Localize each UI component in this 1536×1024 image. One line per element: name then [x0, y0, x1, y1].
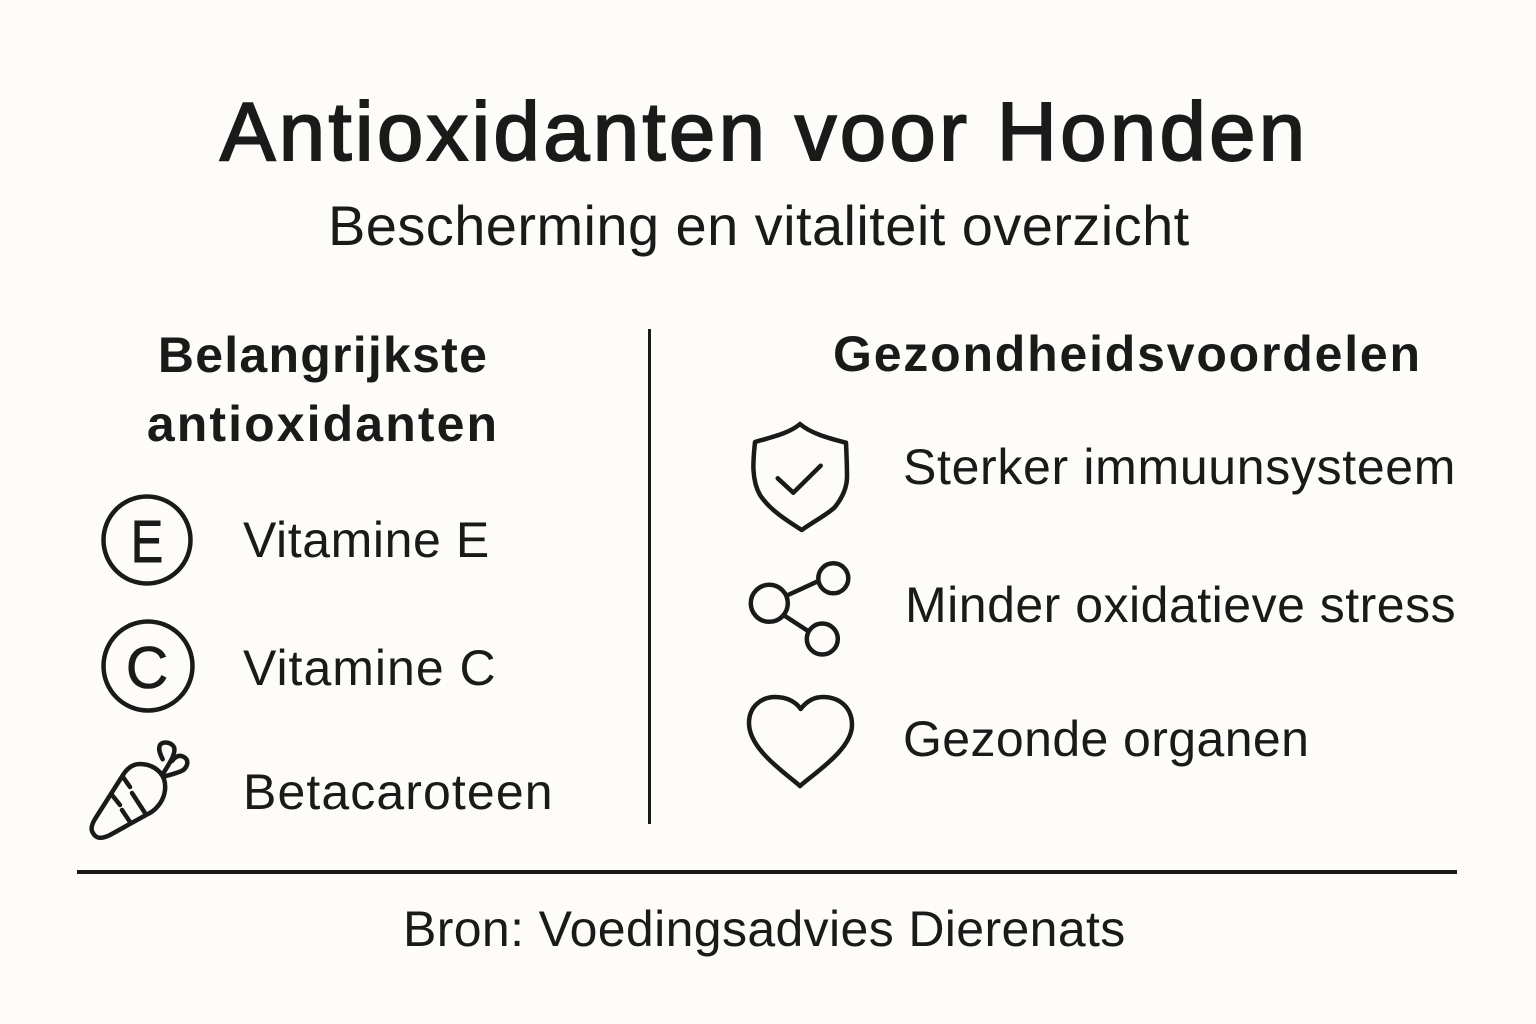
vertical divider [648, 329, 651, 824]
label: minder oxidatieve stress: Minder oxidatieve stress [905, 577, 1456, 633]
label: sterker immuunsysteem: Sterker immuunsysteem [903, 439, 1456, 495]
panel: belangrijkste antioxidanten [89, 327, 554, 840]
subtitle: Bescherming en vitaliteit overzicht [328, 194, 1190, 257]
heading: belangrijkste antioxidanten [147, 327, 499, 452]
footer rule [77, 870, 1457, 874]
panel: gezondheidsvoordelen [746, 326, 1456, 788]
icon: vitamin E: E [131, 510, 163, 575]
label: betacaroteen: Betacaroteen [243, 764, 554, 820]
icon: shield with check [751, 422, 850, 532]
icon: vitamin E [101, 494, 193, 586]
icon: network nodes [748, 561, 851, 657]
label: vitamine E: Vitamine E [243, 512, 490, 568]
heading: gezondheidsvoordelen: Gezondheidsvoordelen [833, 326, 1422, 382]
title: Antioxidanten voor Honden [220, 85, 1309, 178]
label: vitamine C: Vitamine C [243, 640, 497, 696]
icon: vitamin C: C [126, 635, 168, 701]
source line: Bron: Voedingsadvies Dierenats [403, 901, 1126, 957]
heading: belangrijkste antioxidanten: Belangrijkste [158, 327, 488, 383]
icon: heart [746, 694, 854, 788]
label: gezonde organen: Gezonde organen [903, 711, 1309, 767]
icon: vitamin C [101, 619, 195, 713]
icon: carrot [89, 740, 190, 840]
heading: belangrijkste antioxidanten: antioxidanten [147, 396, 499, 452]
